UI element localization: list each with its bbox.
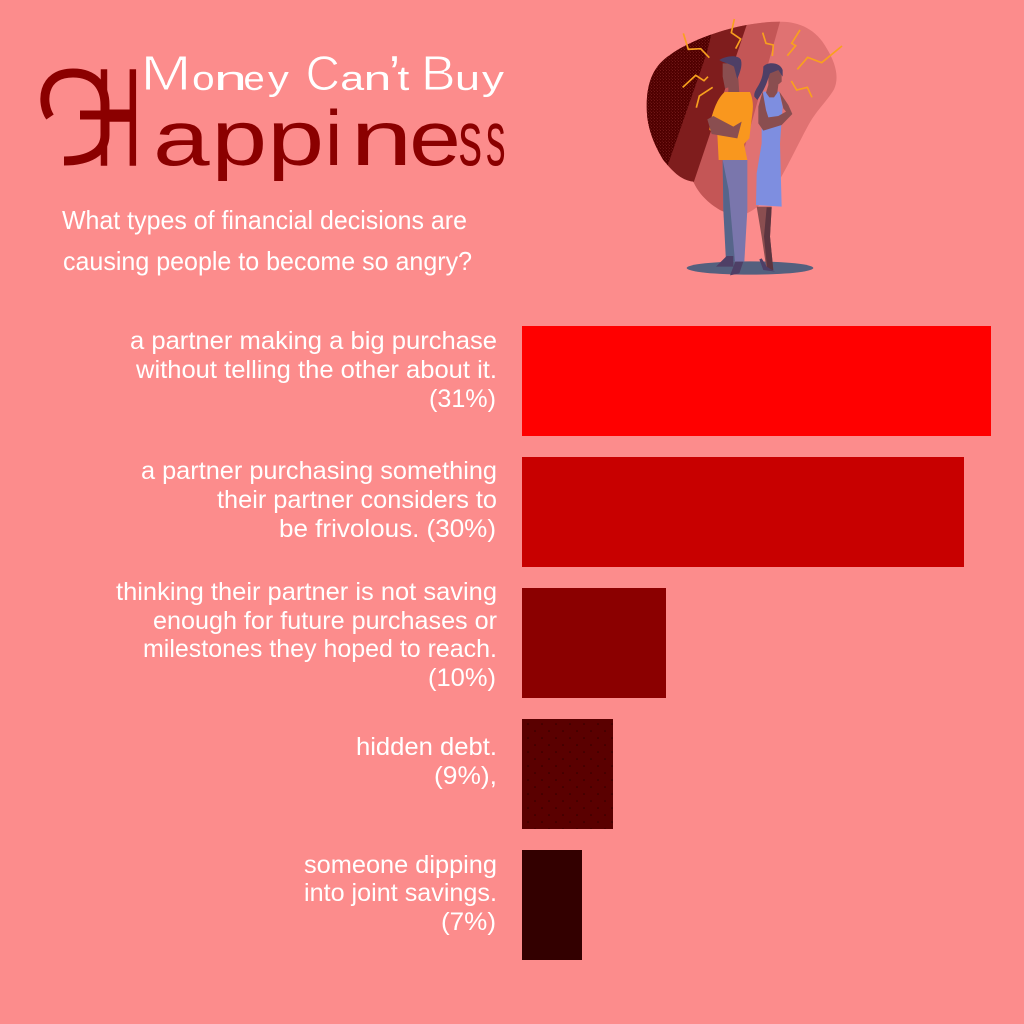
- label: (31%): [429, 385, 496, 413]
- label: without telling the other about it.: [135, 356, 497, 384]
- title line: Money Can't Buy: e: [244, 60, 265, 98]
- title word: Happiness: s: [486, 94, 506, 182]
- label: [141, 457, 497, 543]
- label: (10%): [428, 664, 496, 692]
- label: a partner making a big purchase: [130, 327, 497, 355]
- title line: Money Can't Buy: [140, 47, 504, 101]
- title: [45, 41, 506, 195]
- title line: Money Can't Buy: u: [455, 60, 480, 98]
- label: enough for future purchases or: [153, 607, 497, 635]
- label: their partner considers to: [217, 486, 497, 514]
- title word: Happiness: n: [351, 94, 412, 182]
- subtitle: [62, 205, 472, 276]
- title line: Money Can't Buy: y: [482, 60, 504, 98]
- label: into joint savings.: [304, 879, 497, 907]
- title line: Money Can't Buy: n: [364, 60, 391, 98]
- label: [356, 733, 497, 790]
- title line: Money Can't Buy: a: [340, 60, 364, 98]
- bar 10%: [522, 588, 666, 698]
- bar 31%: [522, 326, 991, 436]
- label: a partner purchasing something: [141, 457, 497, 485]
- label: (7%): [441, 908, 496, 936]
- ground shadow: [687, 261, 813, 275]
- chart row 5: [304, 850, 582, 960]
- label: milestones they hoped to reach.: [143, 635, 497, 663]
- title line: Money Can't Buy: ’: [389, 47, 400, 101]
- title line: Money Can't Buy: t: [398, 60, 410, 98]
- title word: Happiness: p: [212, 94, 267, 182]
- illustration: arguing couple: [646, 18, 842, 276]
- title word: Happiness: e: [409, 94, 461, 182]
- label: [116, 578, 497, 692]
- woman: [754, 63, 792, 272]
- title line: Money Can't Buy: n: [214, 60, 247, 98]
- title word: Happiness: p: [267, 94, 324, 182]
- subtitle: What types of financial decisions are: [62, 205, 467, 235]
- title word: Happiness: s: [459, 94, 482, 182]
- bar 7%: [522, 850, 582, 960]
- label: (9%),: [434, 762, 497, 790]
- man: [707, 56, 753, 275]
- chart row 2: [141, 457, 964, 567]
- title line: Money Can't Buy: M: [140, 47, 192, 101]
- subtitle: causing people to become so angry?: [63, 246, 472, 276]
- label: [130, 327, 497, 413]
- title word: Happiness: i: [325, 94, 342, 182]
- title word: Happiness: [45, 41, 506, 195]
- title line: Money Can't Buy: C: [306, 47, 340, 101]
- title word: Happiness: H: [96, 41, 141, 195]
- chart row 3: [116, 578, 666, 698]
- label: be frivolous. (30%): [279, 515, 496, 543]
- bar 30%: [522, 457, 964, 567]
- anger sparks: [683, 19, 842, 108]
- title line: Money Can't Buy: o: [192, 60, 215, 98]
- chart row 4: [356, 719, 613, 829]
- title line: Money Can't Buy: B: [421, 47, 456, 101]
- chart row 1: [130, 326, 991, 436]
- bar 9%: [522, 719, 613, 829]
- label: someone dipping: [304, 851, 497, 879]
- title word: Happiness: a: [153, 94, 210, 182]
- label: hidden debt.: [356, 733, 497, 761]
- label: [304, 851, 497, 936]
- title line: Money Can't Buy: y: [268, 60, 289, 98]
- background blob: [646, 22, 836, 213]
- label: thinking their partner is not saving: [116, 578, 497, 606]
